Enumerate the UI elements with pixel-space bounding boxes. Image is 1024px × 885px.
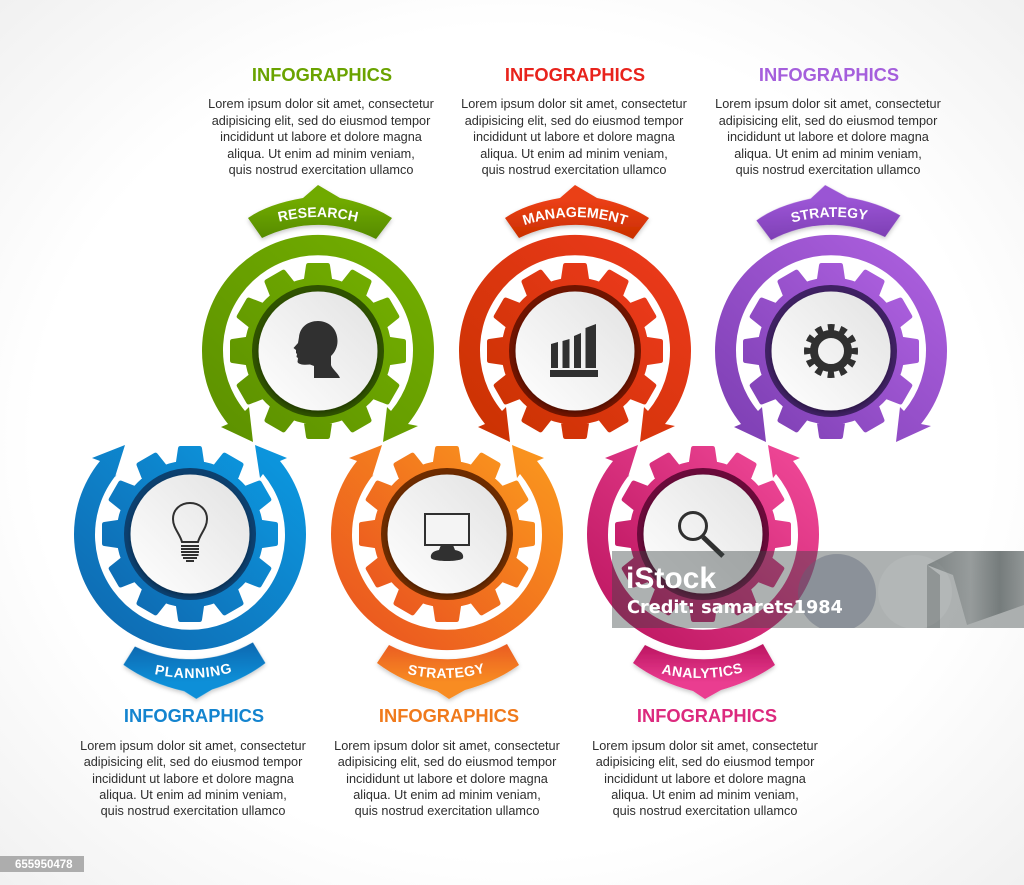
- gear: planning: [104, 448, 276, 620]
- body text: adipisicing elit, sed do eiusmod tempor: [596, 755, 815, 769]
- ribbon shape: [248, 185, 392, 239]
- text block: top left: [208, 64, 435, 177]
- ring arrow: management: [459, 235, 691, 442]
- text block: top middle: [461, 64, 688, 177]
- panel: management: [459, 185, 691, 442]
- gear: management: [490, 266, 660, 436]
- white disc: [388, 474, 506, 594]
- icon: small gear: [808, 328, 854, 374]
- monitor stand: [431, 545, 463, 561]
- white disc: [644, 474, 762, 594]
- heading: INFOGRAPHICS: [637, 705, 777, 726]
- dark hub ring: [381, 468, 513, 600]
- banner: research: [247, 185, 393, 242]
- watermark logo: iStock: [626, 562, 716, 595]
- text block: top right: [715, 64, 942, 177]
- ribbon label: PLANNING: [155, 664, 231, 678]
- body text: Lorem ipsum dolor sit amet, consectetur: [461, 97, 688, 111]
- body text: incididunt ut labore et dolore magna: [220, 130, 423, 144]
- heading: INFOGRAPHICS: [252, 64, 392, 85]
- icon: light bulb: [173, 503, 207, 561]
- banner: planning: [122, 642, 266, 702]
- icon: magnifier: [680, 512, 723, 556]
- ribbon label: MANAGEMENT: [522, 207, 628, 225]
- body text: [80, 739, 307, 818]
- body text: aliqua. Ut enim ad minim veniam,: [480, 147, 668, 161]
- monitor screen: [425, 514, 469, 545]
- ribbon shape: [755, 183, 901, 242]
- watermark banner: [612, 551, 1024, 632]
- panel: strategy purple: [715, 185, 947, 442]
- gear: research: [232, 266, 404, 436]
- ribbon shape: [123, 642, 266, 701]
- body text: quis nostrud exercitation ullamco: [482, 163, 666, 177]
- icon: monitor: [425, 514, 469, 561]
- body text: Lorem ipsum dolor sit amet, consectetur: [208, 97, 435, 111]
- body text: aliqua. Ut enim ad minim veniam,: [611, 788, 799, 802]
- image id tag: [0, 856, 84, 872]
- ribbon shape: [377, 644, 519, 699]
- white disc: [258, 292, 378, 410]
- body text: quis nostrud exercitation ullamco: [736, 163, 920, 177]
- body text: adipisicing elit, sed do eiusmod tempor: [719, 114, 938, 128]
- id background: [0, 856, 84, 872]
- text block: bottom right: [592, 705, 819, 818]
- ring arrow: research: [202, 235, 434, 442]
- body text: adipisicing elit, sed do eiusmod tempor: [212, 114, 431, 128]
- watermark credit: Credit: samarets1984: [627, 598, 843, 618]
- gear: strategy: [746, 266, 916, 436]
- text block: bottom left: [80, 705, 307, 818]
- banner: strategy: [756, 185, 901, 243]
- ribbon label: STRATEGY: [791, 207, 868, 222]
- text block: bottom middle: [334, 705, 561, 818]
- banner: management: [504, 185, 650, 242]
- dark hub ring: [252, 285, 384, 417]
- body text: incididunt ut labore et dolore magna: [92, 772, 295, 786]
- panel: planning: [74, 445, 306, 702]
- body text: aliqua. Ut enim ad minim veniam,: [99, 788, 287, 802]
- dark hub ring: [509, 285, 641, 417]
- body text: adipisicing elit, sed do eiusmod tempor: [465, 114, 684, 128]
- heading: INFOGRAPHICS: [759, 64, 899, 85]
- body text: quis nostrud exercitation ullamco: [229, 163, 413, 177]
- dark hub ring: [124, 468, 256, 600]
- white disc: [516, 292, 634, 410]
- ribbon label: STRATEGY: [408, 663, 483, 678]
- body text: Lorem ipsum dolor sit amet, consectetur: [334, 739, 561, 753]
- heading: INFOGRAPHICS: [124, 705, 264, 726]
- dark hub ring: [765, 285, 897, 417]
- ring arrow: planning: [74, 445, 306, 650]
- heading: INFOGRAPHICS: [505, 64, 645, 85]
- ribbon shape: [633, 644, 775, 699]
- body text: [715, 97, 942, 177]
- white disc: [772, 292, 890, 410]
- bulb base: [181, 546, 199, 561]
- white disc: [130, 474, 250, 594]
- body text: aliqua. Ut enim ad minim veniam,: [353, 788, 541, 802]
- gear: strategy: [362, 448, 532, 620]
- ribbon label: ANALYTICS: [662, 664, 742, 678]
- banner: strategy: [376, 644, 520, 702]
- body text: [208, 97, 435, 177]
- ring arrow: strategy: [715, 235, 947, 442]
- dark hub ring: [637, 468, 769, 600]
- ribbon label: RESEARCH: [278, 207, 358, 222]
- body text: Lorem ipsum dolor sit amet, consectetur: [715, 97, 942, 111]
- ribbon shape: [505, 185, 649, 239]
- body text: quis nostrud exercitation ullamco: [613, 804, 797, 818]
- body text: adipisicing elit, sed do eiusmod tempor: [338, 755, 557, 769]
- body text: incididunt ut labore et dolore magna: [346, 772, 549, 786]
- icon: bar chart: [550, 324, 598, 377]
- panel: strategy orange: [331, 445, 563, 702]
- body text: incididunt ut labore et dolore magna: [604, 772, 807, 786]
- watermark backdrop: [612, 551, 1024, 632]
- body text: [592, 739, 819, 818]
- id number: 655950478: [15, 859, 73, 871]
- banner: analytics: [632, 644, 776, 702]
- body text: [334, 739, 561, 818]
- panel: research: [202, 185, 434, 442]
- heading: INFOGRAPHICS: [379, 705, 519, 726]
- body text: aliqua. Ut enim ad minim veniam,: [734, 147, 922, 161]
- body text: aliqua. Ut enim ad minim veniam,: [227, 147, 415, 161]
- panel: analytics: [587, 445, 819, 702]
- body text: [461, 97, 688, 177]
- body text: incididunt ut labore et dolore magna: [727, 130, 930, 144]
- body text: Lorem ipsum dolor sit amet, consectetur: [592, 739, 819, 753]
- body text: quis nostrud exercitation ullamco: [355, 804, 539, 818]
- body text: quis nostrud exercitation ullamco: [101, 804, 285, 818]
- body text: Lorem ipsum dolor sit amet, consectetur: [80, 739, 307, 753]
- gear: analytics: [618, 448, 788, 620]
- ring arrow: strategy: [331, 445, 563, 650]
- bulb glass: [173, 503, 207, 542]
- icon: head: [294, 321, 340, 378]
- body text: incididunt ut labore et dolore magna: [473, 130, 676, 144]
- body text: adipisicing elit, sed do eiusmod tempor: [84, 755, 303, 769]
- ring arrow: analytics: [587, 445, 819, 650]
